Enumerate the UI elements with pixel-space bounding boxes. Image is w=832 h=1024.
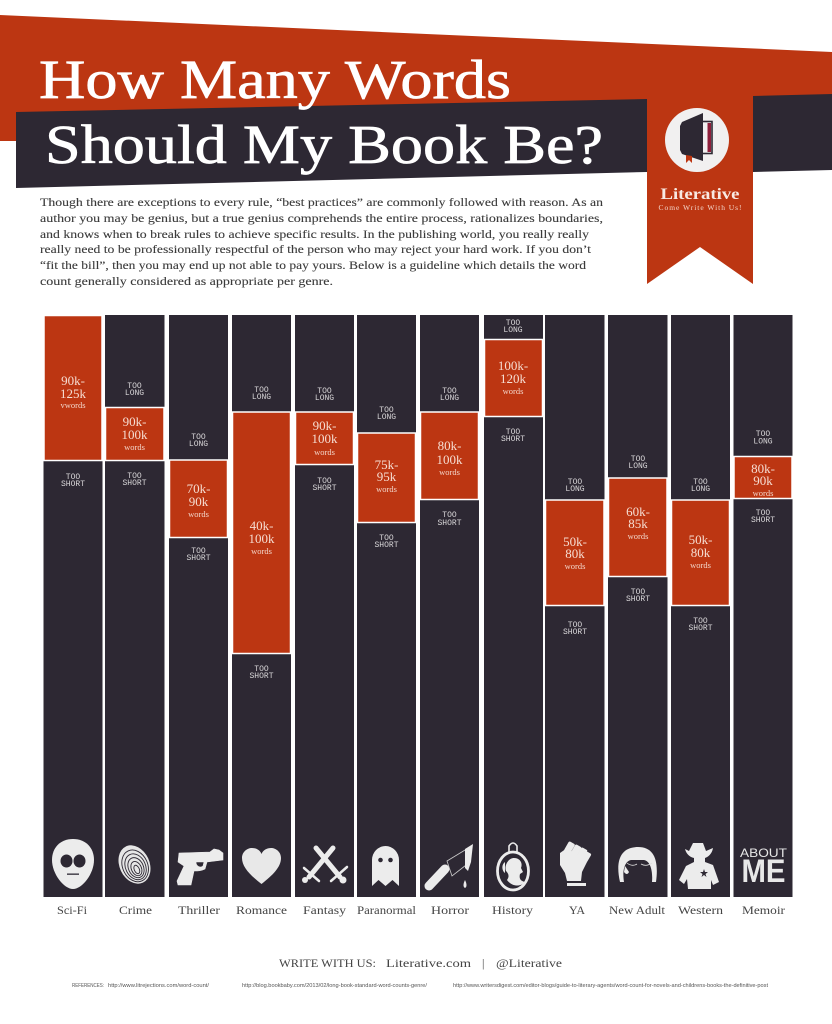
column: Memoir: 90k <box>753 473 773 488</box>
references <box>72 983 768 989</box>
column: New Adult: LONG <box>628 462 648 471</box>
icon: raised fist <box>560 841 592 886</box>
column: History: 120k <box>500 371 526 386</box>
column: Romance <box>232 315 291 897</box>
column: Crime <box>105 315 164 897</box>
intro paragraph <box>40 195 603 288</box>
icon: ghost <box>372 846 399 886</box>
column: Fantasy: words <box>314 447 335 457</box>
column: Memoir: TOO <box>756 509 770 518</box>
ribbon badge <box>647 90 753 284</box>
column: Horror: SHORT <box>437 519 462 528</box>
column: Paranormal: SHORT <box>374 541 399 550</box>
genre labels: History <box>492 905 533 917</box>
title <box>39 49 603 175</box>
intro paragraph: count generally considered as appropriate per genre. <box>40 274 333 288</box>
call to action footer: | <box>482 956 484 970</box>
genre labels: Fantasy <box>303 905 346 917</box>
column: Paranormal: 95k <box>377 469 397 484</box>
column: History: LONG <box>503 326 523 335</box>
column: Horror: 80k- <box>438 438 461 453</box>
column: History: 100k- <box>498 358 528 373</box>
column: History: TOO <box>506 319 520 328</box>
column: Horror: LONG <box>440 394 459 403</box>
call to action footer: Literative.com <box>386 956 472 970</box>
icon: about me: ABOUT <box>740 848 787 860</box>
column: Western: LONG <box>691 485 710 494</box>
column: Sci-Fi <box>44 315 102 897</box>
column: Paranormal: LONG <box>377 413 396 422</box>
genre labels: Western <box>678 905 723 917</box>
column: YA: TOO <box>568 478 582 487</box>
column: Horror <box>420 315 479 897</box>
column: New Adult: words <box>628 531 648 541</box>
references: http://blog.bookbaby.com/2013/02/long-book-standard-word-counts-genre/ <box>242 983 427 989</box>
title: How Many Words <box>39 49 511 110</box>
column: YA: TOO <box>568 621 582 630</box>
column: Paranormal: 75k- <box>375 457 398 472</box>
column: YA: 80k <box>565 546 585 561</box>
column: Horror: TOO <box>442 511 457 520</box>
references: REFERENCES: <box>72 983 104 989</box>
column: Paranormal: TOO <box>379 406 394 415</box>
icon: bloody knife <box>429 844 473 888</box>
genre labels: Crime <box>119 905 152 917</box>
column: Thriller <box>169 315 228 897</box>
column: Romance: TOO <box>254 386 269 395</box>
column: Fantasy: LONG <box>315 394 334 403</box>
column: Horror: words <box>439 467 460 477</box>
intro paragraph: really need to be professionally respectful of the person who may reject your hard work. If you don’t <box>40 242 592 256</box>
column chart <box>44 315 792 897</box>
column: YA: LONG <box>565 485 585 494</box>
column: Western: 80k <box>691 545 711 560</box>
column: Western: 50k- <box>689 532 712 547</box>
column: Sci-Fi: SHORT <box>61 480 85 489</box>
intro paragraph: author you may be genius, but a true genius comprehends the entire process, rationalizes boundaries, <box>40 211 603 225</box>
column: Thriller: 90k <box>189 494 209 509</box>
call to action footer: WRITE WITH US: <box>279 956 376 970</box>
column: Thriller: TOO <box>191 433 206 442</box>
column: YA: SHORT <box>563 628 587 637</box>
column: Romance: 40k- <box>250 518 273 533</box>
column: History: words <box>503 386 523 396</box>
column: Thriller: words <box>188 509 209 519</box>
column: Memoir: words <box>753 488 773 498</box>
title: Should My Book Be? <box>45 114 603 175</box>
column: Fantasy: TOO <box>317 387 332 396</box>
column: Thriller: LONG <box>189 440 208 449</box>
column: Horror: TOO <box>442 387 457 396</box>
column: Crime: 90k- <box>123 414 146 429</box>
column: Crime: TOO <box>127 382 142 391</box>
column: Romance: words <box>251 546 272 556</box>
genre labels: Romance <box>236 905 287 917</box>
intro paragraph: and knows when to break rules to achieve specific results. In the publishing world, you really really <box>40 227 589 241</box>
column: Sci-Fi: vwords <box>60 400 86 410</box>
column: Romance: SHORT <box>249 672 274 681</box>
column: Fantasy: 100k <box>312 431 338 446</box>
references: http://www.litrejections.com/word-count/ <box>108 983 209 989</box>
column: Fantasy: 90k- <box>313 418 336 433</box>
column: Sci-Fi: TOO <box>66 473 80 482</box>
column: YA: 50k- <box>563 534 587 549</box>
call to action footer <box>279 956 562 970</box>
column: History: SHORT <box>501 435 525 444</box>
icon: heart <box>242 848 281 884</box>
column: Romance: TOO <box>254 665 269 674</box>
genre labels <box>57 905 785 917</box>
genre labels: YA <box>569 905 586 917</box>
icon: cowboy sheriff <box>679 843 719 889</box>
intro paragraph: “fit the bill”, then you may end up not able to pay yours. Below is a guideline which details the word <box>40 258 586 272</box>
column: Romance: LONG <box>252 393 271 402</box>
column: Western: TOO <box>693 617 708 626</box>
column: Western: words <box>690 560 711 570</box>
column: Memoir: LONG <box>753 438 773 446</box>
icon: book logo <box>665 108 729 172</box>
column: Fantasy: SHORT <box>312 484 337 493</box>
intro paragraph: Though there are exceptions to every rule, “best practices” are commonly followed with reason. As an <box>40 195 603 209</box>
column: Paranormal: TOO <box>379 534 394 543</box>
column: YA: words <box>565 561 585 571</box>
column: New Adult: TOO <box>631 455 645 464</box>
dark header banner <box>16 94 832 188</box>
column: Western: SHORT <box>688 624 713 633</box>
column: Romance: 100k <box>248 531 275 546</box>
column: New Adult: TOO <box>631 588 645 597</box>
column: Western: TOO <box>693 478 708 487</box>
brand tagline: Come Write With Us! <box>658 203 742 212</box>
column: Crime: SHORT <box>122 479 147 488</box>
icon: crying face with hair <box>618 847 657 882</box>
column: Crime: words <box>124 442 145 452</box>
column: History <box>484 315 543 897</box>
column: Paranormal: words <box>376 484 397 494</box>
column: Thriller: TOO <box>191 547 206 556</box>
column: New Adult: SHORT <box>626 595 650 604</box>
call to action footer: @Literative <box>496 956 562 970</box>
column: Paranormal <box>357 315 416 897</box>
column: Memoir: 80k- <box>751 461 775 476</box>
column: Crime: LONG <box>125 389 144 398</box>
column: Fantasy <box>295 315 354 897</box>
genre labels: Memoir <box>742 905 785 917</box>
column: Fantasy: TOO <box>317 477 332 486</box>
column: Horror: 100k <box>436 452 463 467</box>
references: http://www.writersdigest.com/editor-blogs/guide-to-literary-agents/word-count-for-novels-and-childrens-books-the-definitive-post <box>453 983 768 989</box>
genre labels: Thriller <box>178 905 220 917</box>
icon: gun <box>177 849 223 885</box>
column: Thriller: 70k- <box>187 481 210 496</box>
column: Sci-Fi: 90k- <box>61 373 85 388</box>
genre labels: Sci-Fi <box>57 905 87 917</box>
column: Crime: 100k <box>122 427 148 442</box>
column: Memoir: SHORT <box>751 516 775 525</box>
genre labels: New Adult <box>609 905 666 917</box>
column: History: TOO <box>506 428 520 437</box>
icon: fingerprint <box>112 840 157 889</box>
icon: cameo portrait <box>498 843 528 890</box>
column: YA <box>545 315 604 897</box>
column: Sci-Fi: 125k <box>60 386 86 401</box>
column: Memoir: TOO <box>756 430 770 439</box>
genre labels: Paranormal <box>357 905 416 917</box>
red header banner <box>0 15 832 150</box>
column: New Adult: 85k <box>628 516 648 531</box>
icon: about me: ME <box>742 853 786 889</box>
icon: alien <box>52 839 94 889</box>
brand name: Literative <box>660 186 740 203</box>
column: Western <box>671 315 730 897</box>
column: Memoir <box>734 315 792 897</box>
icon: crossed swords <box>302 848 347 884</box>
genre labels: Horror <box>431 905 469 917</box>
column: Thriller: SHORT <box>186 554 211 563</box>
column: Crime: TOO <box>127 472 142 481</box>
column: New Adult: 60k- <box>626 504 650 519</box>
column: New Adult <box>608 315 668 897</box>
